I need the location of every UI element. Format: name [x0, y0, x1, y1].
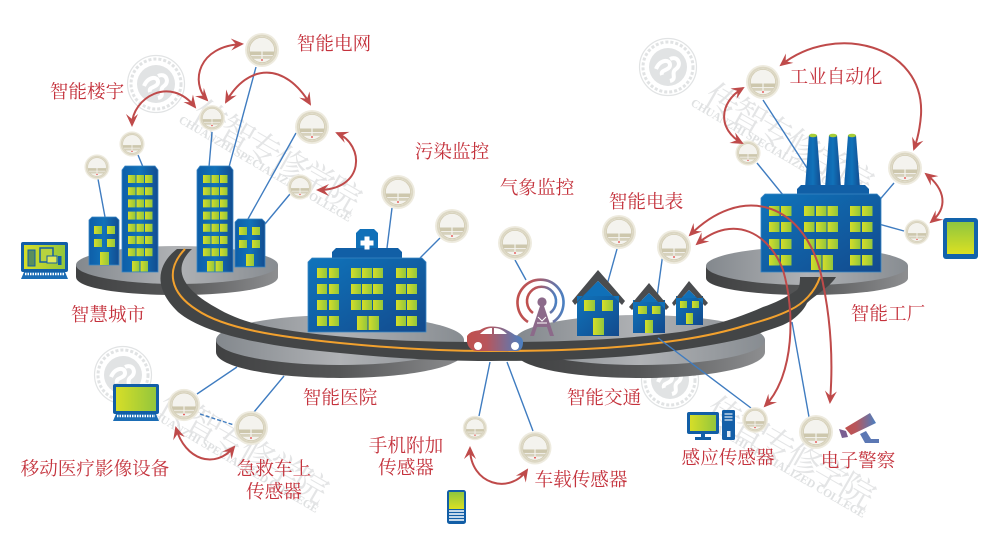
icon: medical laptop: [113, 384, 159, 421]
building: tall tower 3: [197, 166, 233, 272]
sensor: medical device: [168, 389, 200, 421]
sensor: factory tablet: [904, 219, 930, 245]
icon: tablet: [943, 218, 978, 259]
icon: phone: [447, 490, 466, 524]
building: small tower 1: [89, 217, 119, 265]
label: phone sensor: 手机附加: [369, 436, 443, 457]
arrow: building to grid right: [226, 73, 310, 104]
sensor: factory right: [888, 151, 922, 185]
arrow: factory right loop: [926, 174, 942, 222]
label: smart grid: 智能电网: [297, 34, 371, 55]
building: house 2: [629, 283, 669, 333]
arrow: smart building loop: [132, 91, 195, 125]
label: ambulance sensor: 传感器: [246, 482, 302, 503]
sensor: induction: [742, 407, 768, 433]
sensor: smart building centre: [199, 105, 225, 131]
label: induction sensor: 感应传感器: [682, 448, 775, 469]
arrow: factory left loop: [724, 88, 743, 143]
label: mobile medical imaging device: 移动医疗影像设备: [21, 459, 170, 480]
platform: smart traffic: [515, 315, 765, 378]
sensor: pollution right: [435, 209, 469, 243]
icon: car: [467, 326, 523, 351]
label: industrial automation: 工业自动化: [790, 67, 882, 88]
sensor: pollution left: [381, 175, 415, 209]
building: factory: [761, 134, 881, 272]
sensor: phone: [463, 416, 487, 440]
building: house 3: [672, 281, 708, 325]
label: electronic police: 电子警察: [821, 451, 895, 472]
sensor: vehicle: [519, 432, 551, 464]
building: hospital: [308, 229, 426, 332]
label: smart traffic: 智能交通: [567, 388, 641, 409]
label: ambulance sensor: 急救车上: [237, 459, 311, 480]
platform: smart factory: [706, 247, 908, 295]
sensor: smart grid lower: [287, 174, 313, 200]
icon: traffic camera: [839, 413, 879, 443]
sensor: factory left: [735, 140, 761, 166]
label: smart meter: 智能电表: [609, 192, 683, 213]
arrow: grid right to lower: [318, 133, 356, 190]
watermark: top left seal: [128, 56, 372, 225]
watermark: top right seal: [640, 38, 884, 208]
label: smart city: 智慧城市: [71, 305, 145, 326]
connector lines: [98, 67, 904, 431]
label: weather monitoring: 气象监控: [500, 178, 574, 199]
arrow: meter to induction sensor: [697, 229, 790, 406]
label: smart hospital: 智能医院: [303, 388, 378, 409]
sensor: industrial automation: [746, 65, 780, 99]
platform: smart hospital: [216, 315, 464, 378]
sensor: weather: [498, 226, 532, 260]
sensor: smart grid top: [245, 33, 279, 67]
arrow: vehicle loop: [470, 448, 527, 484]
arrow: grid to building: [199, 44, 242, 100]
sensor: smart grid right: [295, 110, 329, 144]
icon: radio tower: [517, 280, 564, 336]
sensor: smart building left: [84, 154, 110, 180]
platform: smart city: [76, 246, 278, 295]
sensor: meter 1: [602, 215, 636, 249]
sensor: meter 2: [657, 230, 691, 264]
label: pollution monitoring: 污染监控: [415, 142, 489, 163]
watermark: bottom left seal: [94, 346, 339, 516]
icon: left laptop: [21, 242, 68, 279]
icon: desktop computer: [687, 410, 735, 440]
label: smart building: 智能楼宇: [50, 82, 124, 103]
arrow: medical loop: [176, 428, 234, 460]
label: smart factory: 智能工厂: [851, 304, 925, 325]
arrow: meter to e-police: [690, 206, 831, 402]
label: phone sensor: 传感器: [378, 458, 434, 479]
road: [160, 249, 836, 361]
watermark: bottom right seal: [642, 352, 886, 521]
building: small tower 4: [235, 219, 265, 267]
label: vehicle sensor: 车载传感器: [535, 470, 628, 491]
building: tall tower 2: [122, 166, 158, 272]
sensor: smart building: [119, 131, 145, 157]
arrow: factory top loop: [781, 43, 921, 149]
sensor: e-police: [799, 415, 833, 449]
sensor: ambulance: [234, 411, 268, 445]
building: house 1: [572, 270, 625, 336]
